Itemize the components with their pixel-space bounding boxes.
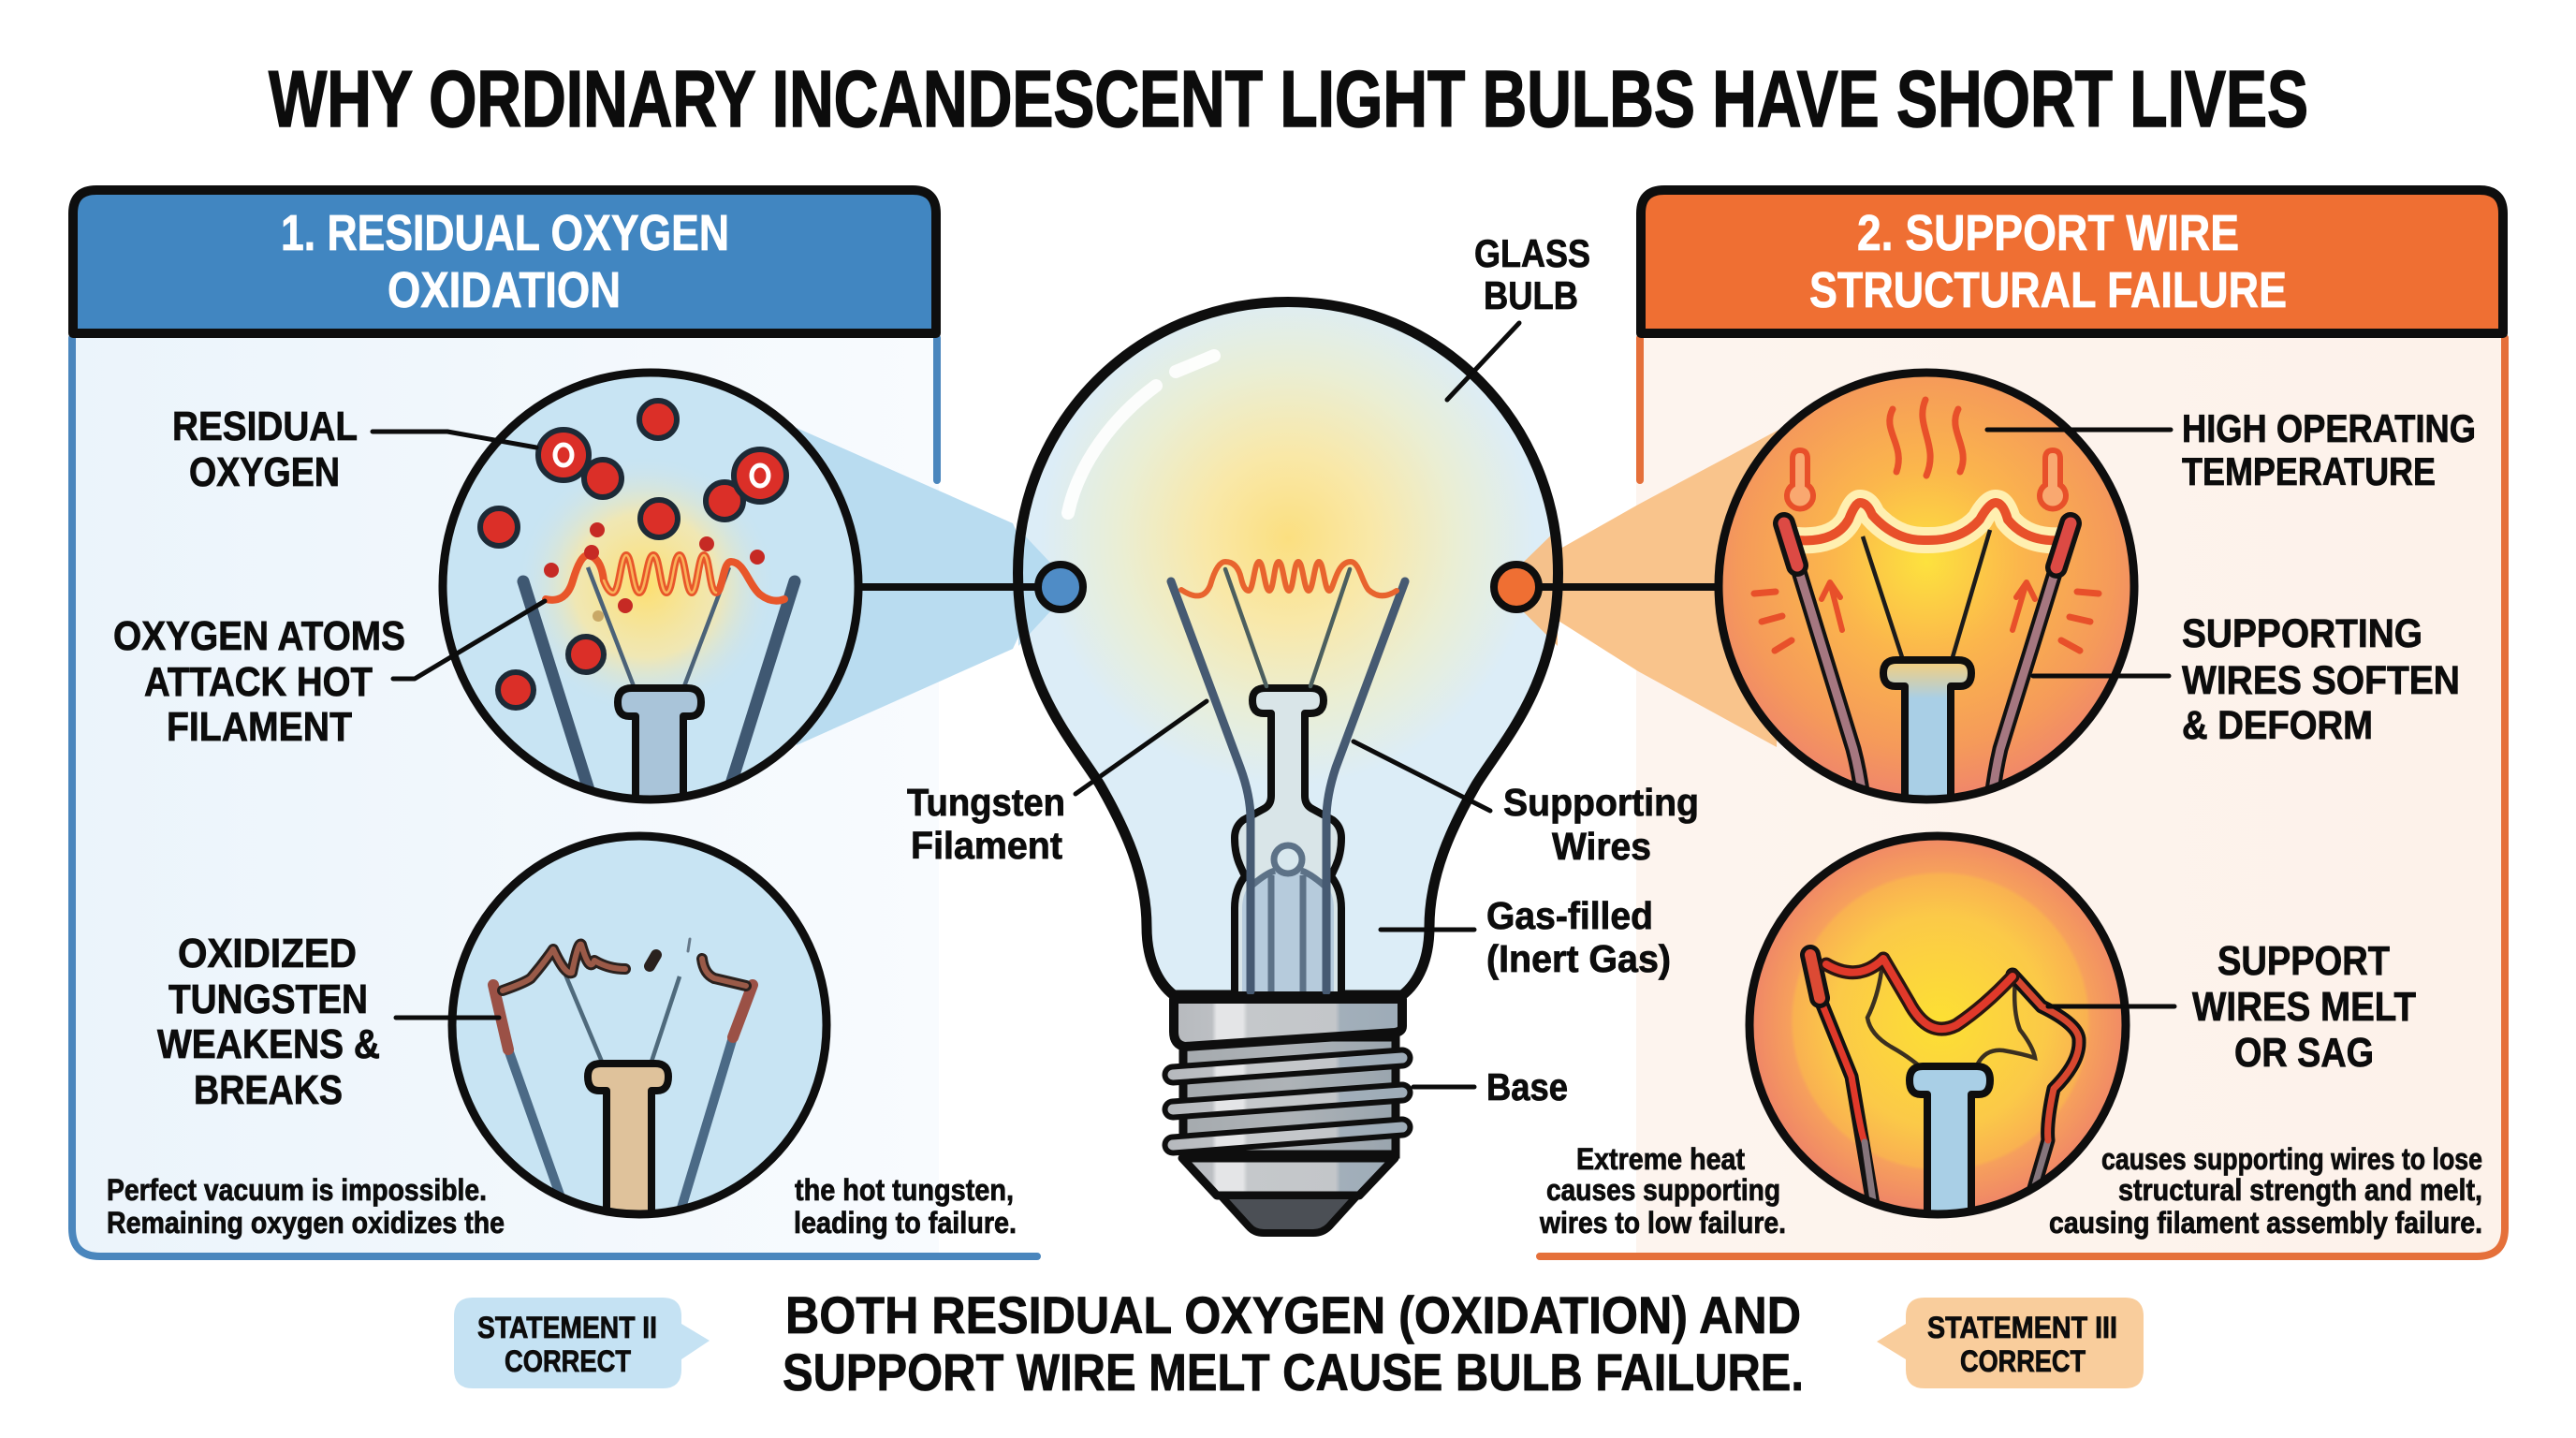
panel header: oxidation: OXIDATION	[388, 262, 621, 318]
panel header: support wire	[1641, 190, 2503, 333]
label: tungsten filament: Filament	[911, 824, 1062, 867]
stem	[588, 1064, 668, 1226]
label: oxidized tungsten weakens and breaks: OXIDIZED	[178, 931, 357, 976]
tungsten filament	[1181, 562, 1397, 595]
conclusion text	[783, 1285, 1804, 1401]
body text: left lower: Perfect vacuum is impossible.	[107, 1173, 487, 1207]
label: oxidized tungsten weakens and breaks: WEAKENS &	[157, 1021, 380, 1067]
support wires	[493, 985, 753, 1226]
magnifier: melted support wires	[1749, 836, 2126, 1226]
label: oxidized tungsten weakens and breaks	[157, 931, 499, 1113]
free oxygen dots	[544, 522, 765, 622]
stem	[618, 688, 701, 814]
label: support wires melt or sag: WIRES MELT	[2192, 984, 2416, 1030]
magnifier: oxidized broken filament	[452, 836, 827, 1226]
label: glass bulb	[1447, 231, 1590, 400]
label: supporting wires: Supporting	[1503, 781, 1699, 824]
heat waves	[1890, 400, 1963, 476]
screw base	[1173, 999, 1402, 1233]
label: high operating temperature	[1987, 406, 2476, 493]
label: support wires melt or sag: OR SAG	[2234, 1030, 2374, 1076]
magnifier: residual oxygen attacking filament	[443, 373, 858, 814]
label: support wires melt or sag	[2048, 938, 2416, 1076]
label: oxygen atoms attack hot filament	[113, 601, 545, 750]
callout: statement II correct	[454, 1298, 710, 1388]
panel header: oxidation	[73, 190, 936, 333]
stem lower	[1242, 868, 1334, 991]
label: support wires melt or sag: SUPPORT	[2217, 938, 2390, 984]
body text: right lower left block: causes supporting	[1546, 1173, 1780, 1207]
label: gas-filled: Gas-filled	[1486, 894, 1653, 937]
body text: right lower right block: causes supporting wires to lose	[2101, 1142, 2482, 1176]
body text: right lower left block	[1539, 1142, 1786, 1240]
label: gas-filled	[1381, 894, 1671, 980]
supporting wires	[1171, 581, 1405, 991]
label: glass bulb: GLASS	[1474, 231, 1590, 275]
O marks	[555, 445, 768, 486]
label: oxygen atoms attack hot filament: FILAMENT	[167, 704, 352, 750]
label: oxygen atoms attack hot filament: ATTACK HOT	[144, 659, 373, 705]
panel header: oxidation: 1. RESIDUAL OXYGEN	[281, 205, 729, 261]
thin wires	[1863, 530, 1990, 657]
body text: left lower continuation	[794, 1173, 1017, 1240]
body text: left lower	[107, 1173, 505, 1240]
sagging filament	[1826, 959, 2012, 1029]
label: high operating temperature: TEMPERATURE	[2182, 449, 2436, 493]
glass highlights	[1068, 356, 1214, 513]
stem	[1883, 660, 1971, 814]
thin wires	[588, 567, 729, 686]
stem	[1910, 1066, 1990, 1226]
label: oxidized tungsten weakens and breaks: BREAKS	[194, 1067, 343, 1113]
heat arrows	[1822, 582, 2035, 630]
label: high operating temperature: HIGH OPERATING	[2182, 406, 2476, 450]
central light bulb	[1018, 301, 1558, 1233]
label: glass bulb: BULB	[1484, 273, 1578, 317]
label: oxidized tungsten weakens and breaks: TUNGSTEN	[168, 976, 368, 1022]
callout: statement II correct: STATEMENT II	[477, 1311, 657, 1344]
glass bulb	[1018, 301, 1558, 995]
label: supporting wires soften and deform: & DEFORM	[2182, 703, 2373, 748]
magnifier: high temperature softening wires	[1719, 373, 2134, 814]
label: gas-filled: (Inert Gas)	[1486, 937, 1671, 980]
body text: right lower left block: wires to low failure.	[1539, 1206, 1786, 1240]
bulb outline	[1018, 301, 1558, 995]
panel: support wire structural failure	[1540, 190, 2505, 1256]
callout: statement III correct	[1877, 1298, 2144, 1388]
inner rods	[1251, 871, 1325, 991]
softened filament	[1797, 503, 2063, 540]
body text: left lower continuation: leading to failure.	[794, 1206, 1017, 1240]
beam tips inside bulb	[1018, 529, 1067, 646]
hot filament	[546, 555, 784, 601]
callout: statement III correct: CORRECT	[1960, 1344, 2086, 1378]
body text: right lower right block	[2049, 1142, 2482, 1240]
sagging thin wires	[1867, 971, 2035, 1067]
label: residual oxygen: RESIDUAL	[172, 404, 358, 449]
label: residual oxygen: OXYGEN	[189, 449, 340, 495]
melted support wires	[1810, 955, 2079, 1226]
callout: statement III correct: STATEMENT III	[1927, 1311, 2117, 1344]
conclusion text: BOTH RESIDUAL OXYGEN (OXIDATION) AND	[785, 1285, 1801, 1344]
label: oxygen atoms attack hot filament: OXYGEN ATOMS	[113, 613, 405, 659]
panel header: support wire: 2. SUPPORT WIRE	[1857, 205, 2239, 261]
body text: right lower right block: structural strength and melt,	[2118, 1173, 2482, 1207]
panel: residual oxygen oxidation	[72, 190, 1037, 1256]
thin lead wires	[1225, 569, 1350, 686]
body text: right lower right block: causing filament assembly failure.	[2049, 1206, 2482, 1240]
body text: right lower left block: Extreme heat	[1576, 1142, 1745, 1176]
label: residual oxygen	[172, 404, 536, 495]
conclusion text: SUPPORT WIRE MELT CAUSE BULB FAILURE.	[783, 1343, 1804, 1401]
softening support wires	[1784, 523, 2071, 814]
label: supporting wires soften and deform	[2033, 611, 2460, 748]
glass bead	[1274, 845, 1302, 873]
magnifier beam: orange	[1554, 428, 1782, 747]
body text: left lower: Remaining oxygen oxidizes the	[107, 1206, 505, 1240]
label: tungsten filament	[907, 701, 1207, 867]
stem glass	[1235, 688, 1341, 995]
label: supporting wires soften and deform: SUPPORTING	[2182, 611, 2422, 656]
connector and node: blue	[858, 565, 1083, 609]
thin wires	[565, 975, 680, 1062]
callout: statement II correct: CORRECT	[505, 1344, 631, 1378]
oxidized filament fragments	[503, 939, 746, 990]
label: supporting wires: Wires	[1552, 825, 1651, 868]
thick support wires	[523, 581, 795, 796]
connector and node: orange	[1494, 565, 1719, 609]
label: supporting wires	[1354, 741, 1699, 868]
panel header: support wire: STRUCTURAL FAILURE	[1809, 262, 2287, 318]
label: tungsten filament: Tungsten	[907, 781, 1065, 824]
oxygen atoms	[480, 401, 786, 708]
beam tip orange inside bulb	[1509, 529, 1558, 646]
label: supporting wires soften and deform: WIRES SOFTEN	[2182, 658, 2460, 703]
magnifier beam: blue	[797, 428, 1030, 745]
heat dashes	[1754, 592, 2099, 651]
label: base: Base	[1486, 1065, 1568, 1108]
body text: left lower continuation: the hot tungsten,	[795, 1173, 1014, 1207]
thermometers	[1787, 450, 2066, 508]
